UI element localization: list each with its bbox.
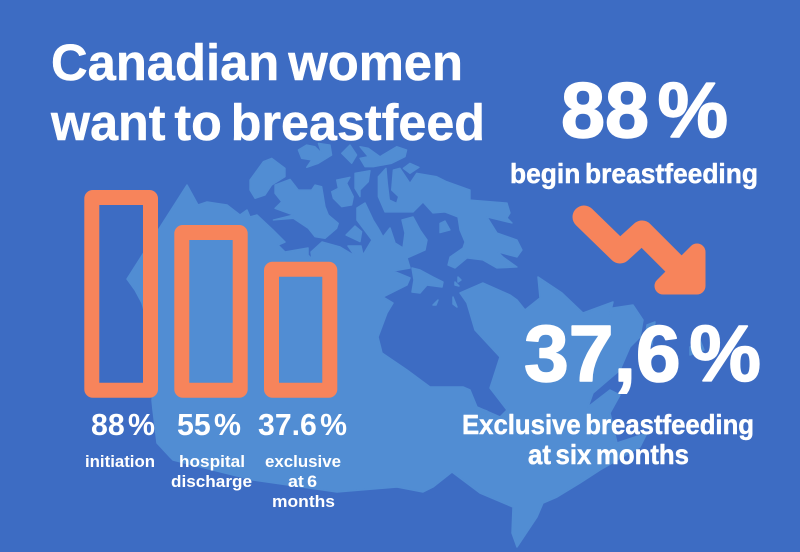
label: exclusive at 6 months: at 6 bbox=[288, 472, 317, 491]
title line 2: want to breastfeed bbox=[50, 94, 485, 151]
Ellesmere Island edge bbox=[360, 147, 407, 167]
title bbox=[50, 34, 485, 151]
bar: exclusive at 6 months bbox=[272, 269, 330, 390]
Baffin Island bbox=[378, 168, 522, 268]
Prince of Wales Island bbox=[332, 177, 353, 207]
bar labels bbox=[85, 452, 341, 511]
label: hospital discharge: discharge bbox=[171, 472, 252, 491]
value: 37.6 %: 37.6 % bbox=[258, 407, 347, 442]
Arctic islands bbox=[250, 143, 522, 268]
title line 1: Canadian women bbox=[51, 34, 463, 91]
value: 88 %: 88 % bbox=[91, 407, 155, 442]
Victoria Island bbox=[273, 179, 338, 238]
label: exclusive at 6 months: months bbox=[272, 492, 335, 511]
Bylot and northern islets bbox=[403, 163, 419, 173]
label: exclusive at 6 months: exclusive bbox=[265, 452, 341, 471]
stat: 88 %: 88 % bbox=[561, 66, 728, 154]
bar: hospital discharge bbox=[182, 232, 240, 390]
Banks Island bbox=[250, 158, 285, 198]
Prince Charles Island bbox=[440, 221, 450, 233]
Southampton Island bbox=[412, 268, 443, 293]
caption: exclusive breastfeeding at six months: Exclusive breastfeeding bbox=[462, 409, 754, 440]
mainland bbox=[127, 185, 647, 547]
Melville Island bbox=[298, 143, 332, 167]
King William Island bbox=[346, 226, 362, 242]
value: 55 %: 55 % bbox=[177, 407, 241, 442]
label: initiation: initiation bbox=[85, 452, 155, 471]
Somerset Island bbox=[355, 171, 370, 197]
Bathurst Island bbox=[342, 145, 357, 163]
arrow: declining trend bbox=[584, 217, 697, 286]
Hudson Strait islets bbox=[433, 277, 461, 307]
caption: begin breastfeeding: begin breastfeeding bbox=[510, 158, 758, 189]
bar chart bbox=[92, 198, 330, 390]
label: hospital discharge: hospital bbox=[179, 452, 245, 471]
Newfoundland bbox=[645, 322, 704, 355]
bar: initiation bbox=[92, 198, 150, 390]
James Bay island bbox=[480, 409, 487, 414]
map of Canada bbox=[127, 143, 704, 547]
caption: exclusive breastfeeding at six months: at six months bbox=[528, 439, 689, 470]
stat: 37,6 %: 37,6 % bbox=[524, 309, 761, 398]
bar values bbox=[91, 407, 347, 442]
